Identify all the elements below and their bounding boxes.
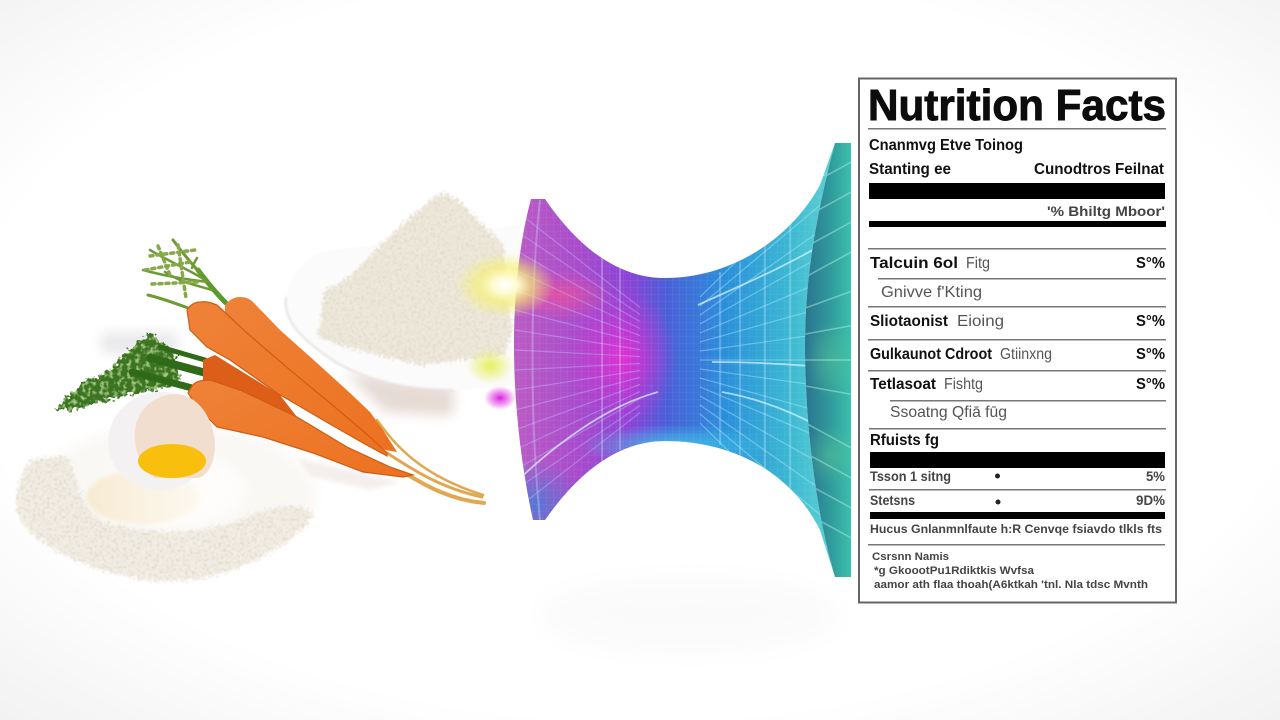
egg shell <box>100 384 220 498</box>
label text rows: Cunodtros Feilnat <box>1034 161 1165 178</box>
label text rows: Sliotaonist <box>870 313 949 330</box>
label text rows <box>869 137 1166 591</box>
flour pile <box>16 455 313 581</box>
plate of flour <box>286 193 520 416</box>
light flare: magenta <box>484 386 516 410</box>
label text rows: '% Bhiltg Mboor' <box>1047 203 1165 219</box>
plate shadow <box>345 372 455 416</box>
plate edge shading <box>286 297 453 390</box>
hidden carrot <box>203 355 297 417</box>
egg white pool <box>86 470 200 524</box>
label text rows: Tsson 1 sitng <box>870 468 951 484</box>
label text rows: Stanting ee <box>869 161 951 178</box>
label title: Nutrition Facts <box>868 81 1166 130</box>
label text rows: Stetsns <box>870 492 915 508</box>
label text rows: Ssoatng Qfiā fūg <box>890 404 1007 421</box>
shell interior <box>135 394 215 478</box>
light flare: yellow <box>455 252 555 318</box>
middle carrot <box>187 302 387 456</box>
funnel body <box>514 144 835 576</box>
greens: upper bunch <box>143 240 226 308</box>
label text rows: S°% <box>1136 376 1165 393</box>
flour mound <box>317 193 512 365</box>
label text rows: aamor ath flaa thoah(A6ktkah 'tnl. Nla tdsc Mvnth <box>874 579 1148 591</box>
label text rows: Gtiinxng <box>1000 346 1052 363</box>
right grid rays <box>700 172 828 548</box>
floor shadow <box>540 579 840 651</box>
label box <box>859 78 1176 602</box>
back panel <box>805 143 851 577</box>
label text rows: Csrsnn Namis <box>872 551 949 563</box>
carrots <box>54 240 484 503</box>
bright rays <box>524 249 812 476</box>
carrot tails <box>377 420 484 503</box>
yolk <box>138 444 206 478</box>
label text rows: Rfuists fg <box>870 432 939 449</box>
faint white flour <box>35 425 315 565</box>
left grid rays <box>515 210 640 510</box>
label text rows: Fitg <box>966 255 990 272</box>
front carrot <box>188 380 413 477</box>
label text rows: Tetlasoat <box>870 376 937 393</box>
label text rows: Cnanmvg Etve Toinog <box>869 137 1023 154</box>
label heavy bars <box>869 183 1166 519</box>
label text rows: S°% <box>1136 255 1165 272</box>
label text rows: 5% <box>1146 468 1166 484</box>
label text rows: S°% <box>1136 313 1165 330</box>
label text rows: Hucus Gnlanmnlfaute h:R Cenvqe fsiavdo tlkls fts <box>870 522 1162 536</box>
plate <box>286 225 520 390</box>
funnel transformation <box>514 143 851 577</box>
label text rows: Gnivve f'Kting <box>881 284 982 301</box>
flour ring with egg <box>16 425 315 581</box>
label rules <box>868 128 1166 546</box>
light flare: lime <box>466 348 514 384</box>
label text rows: Eioing <box>957 313 1004 330</box>
label text rows: S°% <box>1136 346 1165 363</box>
label text rows: *g GkoootPu1Rdiktkis Wvfsa <box>874 565 1035 577</box>
label text rows: Gulkaunot Cdroot <box>870 346 993 363</box>
label text rows: Fishtg <box>944 376 983 393</box>
label text rows: 9D% <box>1136 492 1166 508</box>
label text rows: Talcuin 6ol <box>870 255 958 272</box>
vertical grid lines <box>532 200 790 520</box>
shell outer <box>100 384 220 498</box>
greens: lower stems <box>132 347 206 388</box>
nutrition facts label <box>859 78 1176 602</box>
white flour centre <box>105 454 245 526</box>
greens: lower bunch <box>54 333 180 410</box>
soft shadow behind carrot greens <box>100 332 178 354</box>
carrot shadow <box>297 458 400 490</box>
back carrot <box>225 297 397 452</box>
